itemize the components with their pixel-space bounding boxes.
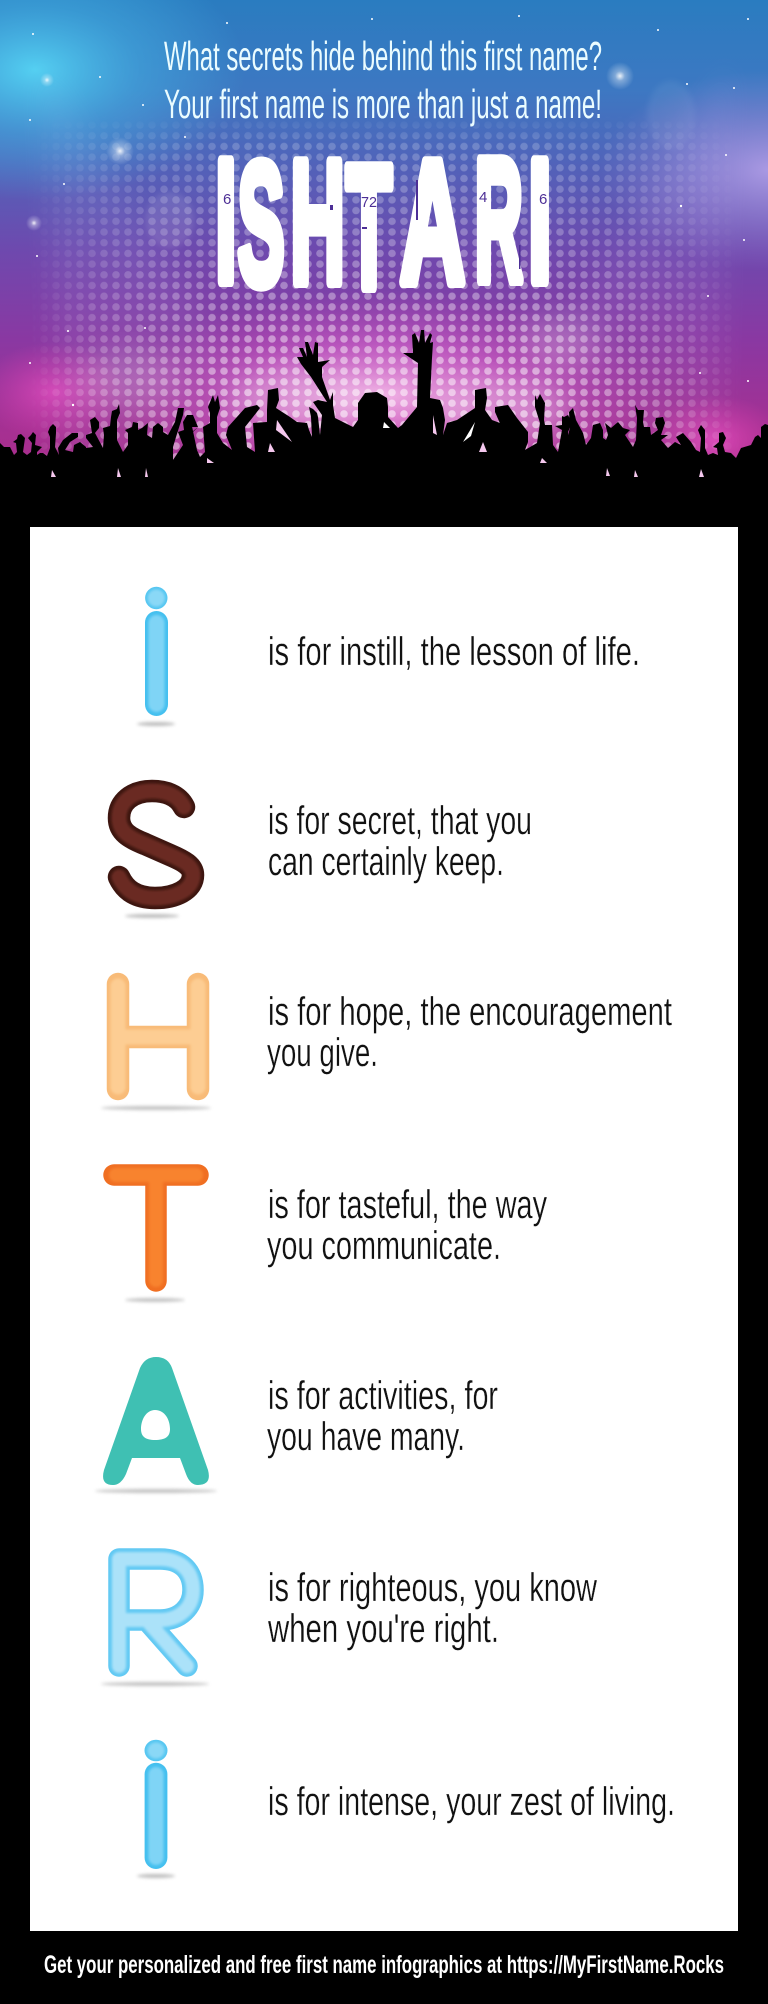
icon: blue letter I [137, 1740, 175, 1878]
text: tasteful lines [267, 1183, 547, 1268]
icon: brown letter S [119, 791, 193, 918]
panel: letter meanings [30, 527, 738, 1931]
icon: blue letter I [137, 587, 175, 726]
text: tasteful lines: is for tasteful, the way [268, 1183, 547, 1227]
title: first name: H [290, 124, 345, 319]
text: righteous lines [267, 1566, 597, 1651]
text: secret lines [268, 799, 532, 884]
icon: orange letter T [114, 1175, 198, 1302]
crowd silhouette [0, 330, 768, 530]
text: hope lines: you give. [267, 1031, 378, 1075]
title: first name: R [475, 122, 523, 317]
text: righteous lines: is for righteous, you know [268, 1566, 597, 1610]
text: activities lines: you have many. [267, 1415, 465, 1459]
letter row: R righteous [101, 1559, 597, 1686]
title: first name: S [238, 126, 285, 321]
text: I [528, 123, 552, 318]
text: hope lines [267, 990, 672, 1075]
text: secret lines: can certainly keep. [268, 840, 504, 884]
title: first name: 72 [361, 194, 377, 211]
text: instill line: is for instill, the lesson of life. [268, 630, 640, 674]
title: first name: T [346, 129, 392, 324]
concert header background [0, 0, 768, 500]
title: first name: 4 [479, 189, 487, 206]
crowd light gaps [51, 415, 704, 477]
text: tasteful lines: you communicate. [267, 1224, 501, 1268]
text: secret lines: is for secret, that you [268, 799, 532, 843]
text: activities lines: is for activities, for [268, 1374, 498, 1418]
letter row: I intense [137, 1740, 675, 1878]
letter row: I instill [137, 587, 640, 726]
icon: peach letter H [101, 984, 211, 1110]
title: first name: 6 [539, 191, 547, 208]
letter row: A activities [95, 1357, 498, 1493]
letter row: T tasteful [114, 1175, 547, 1302]
icon: light blue letter R [101, 1559, 209, 1686]
title: first name [215, 122, 552, 324]
title: first name: I [215, 123, 237, 318]
title: first name: A [400, 124, 465, 319]
letter row: H hope [101, 984, 672, 1110]
letter row: S secret [119, 791, 532, 918]
icon: teal letter A [95, 1357, 217, 1493]
text: activities lines [267, 1374, 498, 1459]
text: righteous lines: when you're right. [267, 1607, 499, 1651]
title: first name: 6 [223, 191, 231, 208]
